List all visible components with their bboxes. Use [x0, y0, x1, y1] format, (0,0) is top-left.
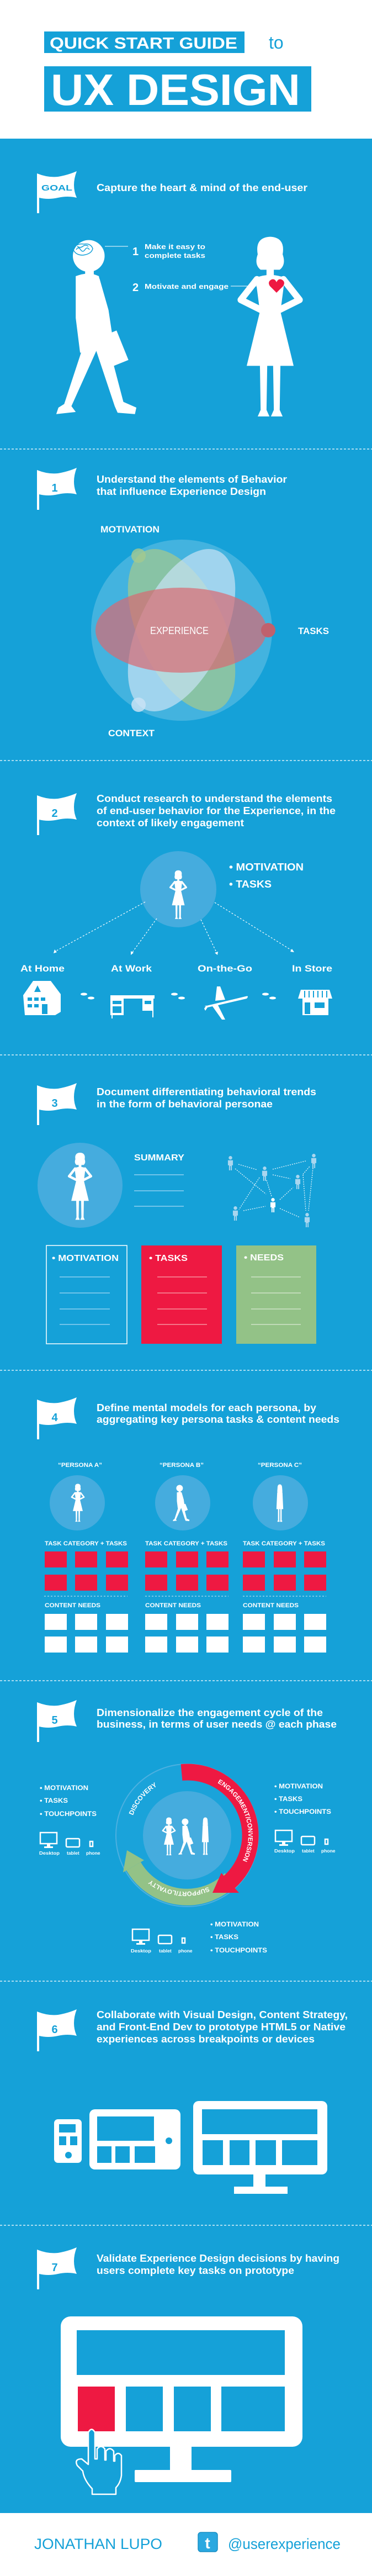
heading 3: Document differentiating behavioral trends [97, 1086, 316, 1097]
heading 2: of end-user behavior for the Experience, in the [97, 805, 336, 816]
callout 2: 2 [132, 282, 139, 294]
icon: flag 2 [37, 793, 77, 835]
card: motivation [46, 1245, 127, 1344]
icon: flag 5: 5 [51, 1714, 58, 1727]
task grids: CONTENT NEEDS [145, 1602, 201, 1609]
heading 2: Conduct research to understand the elements [97, 793, 332, 804]
callout 1 [105, 242, 205, 260]
heading 5 [97, 1707, 337, 1730]
engagement cycle diagram: ENGAGEMENT/CONVERSION [217, 1780, 253, 1862]
venn diagram [91, 533, 275, 727]
icon: prototype monitor [61, 2316, 302, 2482]
icon: airplane [204, 986, 248, 1020]
card: needs [236, 1245, 316, 1344]
devices: bottom: tablet [159, 1948, 172, 1954]
persona labels: “PERSONA B” [160, 1462, 204, 1469]
summary: SUMMARY [134, 1153, 184, 1163]
card: motivation: • MOTIVATION [52, 1254, 119, 1263]
engagement cycle diagram: DISCOVERY [129, 1782, 156, 1815]
author name: JONATHAN LUPO [34, 2536, 162, 2552]
devices: left [39, 1833, 100, 1856]
icon: desktop monitor [193, 2101, 327, 2194]
context labels: At Work [111, 963, 152, 974]
figure: standing woman with heart [241, 237, 300, 416]
icon: twitter: t [205, 2535, 210, 2552]
heading 4 [97, 1402, 339, 1425]
callout 1: 1 [132, 246, 139, 258]
panel: step 5 [37, 1700, 337, 1954]
label motivation: MOTIVATION [100, 524, 160, 535]
icon: tablet [89, 2109, 180, 2169]
task grids: TASK CATEGORY + TASKS [243, 1540, 325, 1547]
icon: footprints [81, 993, 276, 1000]
panel: step 4 [37, 1397, 339, 1653]
dashed arrows [56, 902, 292, 952]
summary [134, 1153, 184, 1206]
list: motivation tasks [229, 862, 304, 890]
heading 6 [97, 2009, 348, 2045]
icon: flag 3 [37, 1083, 77, 1125]
list: left phase: • MOTIVATION [40, 1784, 88, 1792]
panel: goal [37, 171, 307, 416]
icon: flag 1 [37, 468, 77, 510]
list: right phase: • TOUCHPOINTS [274, 1808, 331, 1815]
heading 1 [97, 474, 287, 497]
icon: desk [110, 995, 155, 1018]
icon: flag 4 [37, 1397, 77, 1439]
callout 2: Motivate and engage [145, 282, 228, 291]
list: bottom phase [210, 1920, 267, 1954]
heading 4: aggregating key persona tasks & content needs [97, 1414, 339, 1425]
icon: twitter [198, 2532, 217, 2552]
panel: step 2 [20, 793, 336, 1020]
icon: flag 6: 6 [51, 2024, 58, 2036]
task grids: CONTENT NEEDS [45, 1602, 100, 1609]
persona labels: “PERSONA C” [258, 1462, 302, 1469]
engagement cycle diagram: SUPPORT/LOYALTY [148, 1881, 210, 1896]
label context: CONTEXT [108, 728, 155, 738]
icon: goal flag [37, 171, 77, 213]
task grids: CONTENT NEEDS [243, 1602, 299, 1609]
persona circle [140, 851, 216, 927]
heading 2: context of likely engagement [97, 817, 244, 828]
twitter handle: @userexperience [228, 2536, 341, 2552]
list: right phase: • TASKS [274, 1795, 302, 1803]
list: bottom phase: • TASKS [210, 1933, 238, 1941]
task grids: TASK CATEGORY + TASKS [45, 1540, 127, 1547]
icon: pointing hand [76, 2429, 121, 2494]
icon: phone [54, 2119, 82, 2163]
devices: right [274, 1830, 336, 1854]
heading 7: users complete key tasks on prototype [97, 2265, 294, 2276]
panel: step 6 [37, 2009, 348, 2194]
devices: left: phone [86, 1850, 100, 1856]
devices: right: phone [321, 1848, 336, 1854]
list: right phase: • MOTIVATION [274, 1782, 323, 1790]
callout 2 [132, 282, 267, 294]
list: left phase: • TOUCHPOINTS [40, 1810, 97, 1818]
icon: store [298, 990, 332, 1015]
devices: left: tablet [67, 1850, 79, 1856]
persona circle [38, 1143, 123, 1228]
list: bottom phase: • TOUCHPOINTS [210, 1946, 267, 1954]
heading 1: Understand the elements of Behavior [97, 474, 287, 485]
icon: flag 6 [37, 2009, 77, 2051]
heading 3 [97, 1086, 316, 1110]
list: left phase: • TASKS [40, 1797, 68, 1804]
engagement cycle diagram [115, 1764, 259, 1907]
devices: bottom: Desktop [131, 1948, 151, 1954]
list: left phase [40, 1784, 97, 1818]
devices: right: tablet [302, 1848, 315, 1854]
figure: walking man with brain [56, 240, 136, 414]
icon: flag 2: 2 [51, 807, 58, 820]
footer [34, 2532, 341, 2552]
icon: flag 3: 3 [51, 1097, 58, 1110]
context labels: In Store [292, 963, 332, 974]
context labels: At Home [20, 963, 65, 974]
heading 7: Validate Experience Design decisions by having [97, 2253, 339, 2264]
title: to [269, 33, 284, 52]
label tasks: TASKS [298, 626, 329, 636]
goal heading: Capture the heart & mind of the end-user [97, 182, 307, 193]
card: tasks: • TASKS [149, 1254, 188, 1263]
heading 6: and Front-End Dev to prototype HTML5 or Native [97, 2021, 346, 2033]
heading 5: business, in terms of user needs @ each phase [97, 1719, 337, 1730]
icon: flag 1: 1 [51, 482, 58, 494]
heading 2 [97, 793, 336, 828]
dividers [0, 449, 372, 2225]
icon: flag 4: 4 [51, 1412, 58, 1424]
devices: bottom: phone [178, 1948, 193, 1954]
panel: step 7 [37, 2247, 339, 2494]
card: tasks [141, 1245, 222, 1344]
venn diagram: EXPERIENCE [150, 625, 209, 636]
panel: step 3 [37, 1083, 316, 1344]
heading 5: Dimensionalize the engagement cycle of the [97, 1707, 323, 1718]
heading 1: that influence Experience Design [97, 486, 266, 497]
icon: house [23, 981, 61, 1015]
title [44, 31, 311, 114]
card: needs: • NEEDS [244, 1253, 284, 1263]
persona labels: “PERSONA A” [58, 1462, 102, 1469]
list: motivation tasks: • TASKS [229, 879, 272, 890]
icon: flag 5 [37, 1700, 77, 1742]
task grids: TASK CATEGORY + TASKS [145, 1540, 227, 1547]
network of people [228, 1154, 316, 1227]
icon: goal flag: GOAL [41, 183, 72, 193]
callout 1: Make it easy to [145, 242, 205, 251]
icon: flag 7 [37, 2247, 77, 2289]
heading 6: Collaborate with Visual Design, Content Strategy, [97, 2009, 348, 2020]
heading 4: Define mental models for each persona, by [97, 1402, 316, 1413]
heading 6: experiences across breakpoints or devices [97, 2034, 315, 2045]
icon: flag 7: 7 [51, 2262, 58, 2274]
persona labels [58, 1462, 302, 1469]
context labels [20, 963, 332, 974]
persona circles [50, 1475, 308, 1530]
callout 1: complete tasks [145, 251, 205, 260]
context labels: On-the-Go [198, 963, 252, 974]
devices: bottom [131, 1929, 193, 1954]
list: bottom phase: • MOTIVATION [210, 1920, 259, 1928]
title: UX DESIGN [51, 65, 300, 114]
header background [0, 0, 372, 139]
list: right phase [274, 1782, 331, 1815]
task grids [44, 1540, 326, 1653]
list: motivation tasks: • MOTIVATION [229, 862, 304, 873]
devices: right: Desktop [274, 1848, 295, 1854]
heading 3: in the form of behavioral personae [97, 1099, 273, 1110]
devices: left: Desktop [39, 1850, 60, 1856]
title: QUICK START GUIDE [50, 35, 237, 52]
heading 7 [97, 2253, 339, 2276]
panel: step 1 [37, 468, 329, 738]
